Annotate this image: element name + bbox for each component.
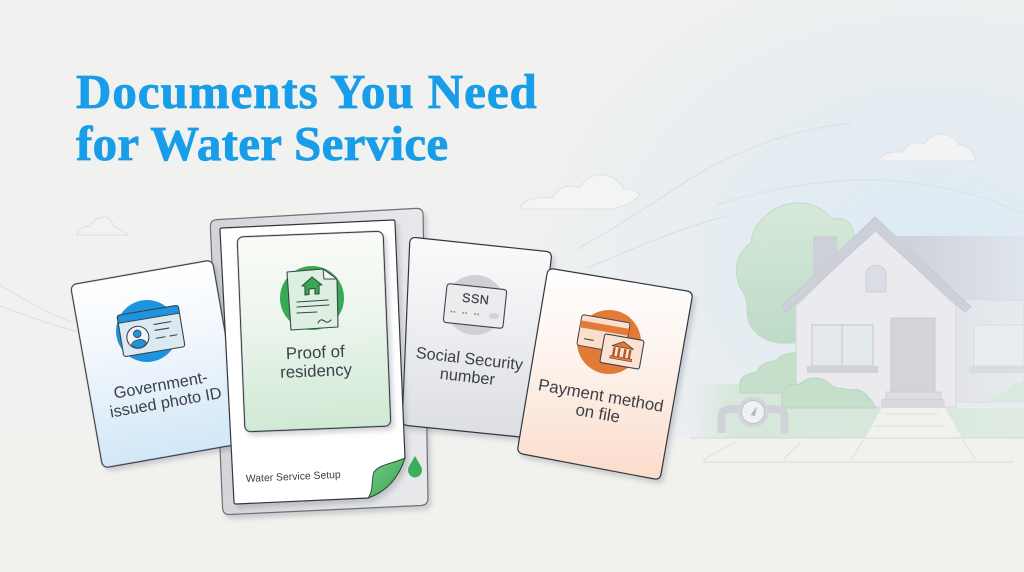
label: Proof of <box>286 342 345 363</box>
card: government-issued photo ID <box>70 260 245 468</box>
icon: water drop <box>408 456 422 478</box>
card body <box>402 238 551 437</box>
front window <box>807 325 878 373</box>
clipboard backing <box>210 208 428 515</box>
lawn <box>690 384 1024 438</box>
card body <box>237 231 391 432</box>
icon: SSN card: SSN <box>461 291 490 307</box>
label: number <box>439 365 496 389</box>
icon: residency document <box>280 266 344 330</box>
label: Social Security <box>415 344 525 374</box>
door <box>891 318 935 392</box>
roof <box>781 217 971 312</box>
tree <box>736 203 854 343</box>
title: Documents You Need <box>76 64 538 119</box>
card: payment method on file <box>518 269 692 479</box>
label: Payment method <box>537 375 665 416</box>
title <box>76 64 538 171</box>
sheet <box>220 220 405 504</box>
attic window <box>866 265 886 292</box>
label <box>279 342 353 382</box>
label: on file <box>574 400 622 427</box>
card body <box>70 260 245 468</box>
house body <box>796 229 956 407</box>
icon: card and bank <box>577 310 644 374</box>
label <box>534 375 665 434</box>
front walkway <box>865 408 962 438</box>
sidewalk lines <box>690 414 1024 462</box>
label: issued photo ID <box>108 384 223 422</box>
card body <box>518 269 692 479</box>
icon: photo ID <box>116 300 185 362</box>
sheet caption: Water Service Setup <box>246 470 341 485</box>
card: proof of residency <box>237 231 391 432</box>
label: residency <box>280 360 353 382</box>
steps <box>882 392 944 407</box>
document sheet <box>220 220 422 504</box>
water meter <box>722 396 784 433</box>
label <box>413 344 525 392</box>
background clouds and wind lines <box>0 123 1024 331</box>
chimney <box>813 236 837 286</box>
title: for Water Service <box>76 116 448 171</box>
label: Government- <box>112 368 209 403</box>
icon: SSN card <box>443 275 507 335</box>
page curl <box>368 458 405 498</box>
side wing <box>897 236 1024 300</box>
house scene <box>690 203 1024 462</box>
bushes <box>740 353 1024 408</box>
card: social security number <box>402 238 551 437</box>
label <box>105 366 223 422</box>
